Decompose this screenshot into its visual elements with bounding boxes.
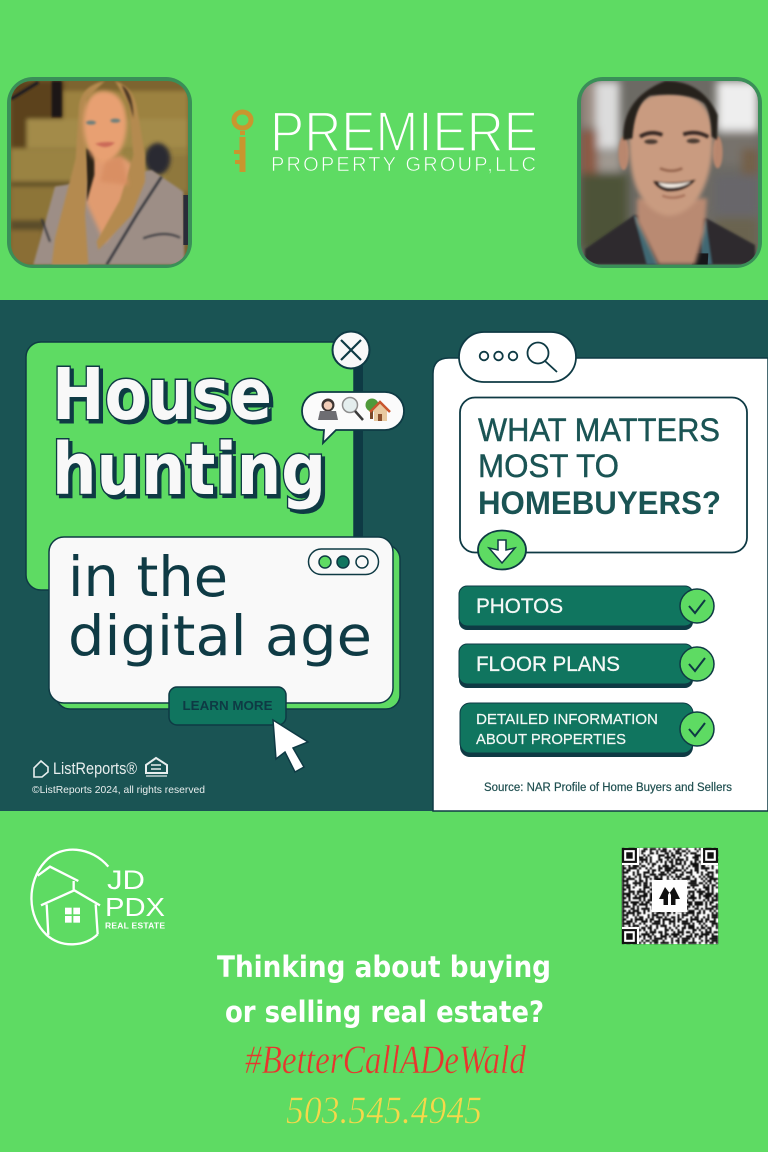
icon: ListReports house <box>34 761 48 777</box>
panel: in the digital age card <box>49 537 400 709</box>
button: learn more <box>169 687 286 725</box>
hashtag: #BetterCallADeWald <box>245 1037 527 1082</box>
QR code <box>622 848 718 944</box>
list item: floor plans <box>459 644 714 688</box>
sweater <box>33 170 184 265</box>
photo: man agent <box>577 77 762 268</box>
icon: woman at laptop <box>318 398 338 420</box>
call to action text <box>217 950 551 1029</box>
heading: what matters most to homebuyers: WHAT MATTERS <box>478 412 720 448</box>
brand: ListReports footer: ListReports® <box>53 760 137 778</box>
panel: what matters white card <box>433 332 768 811</box>
shirt <box>634 215 712 265</box>
logo: Premiere Property Group: PREMIERE <box>270 100 538 164</box>
photo: woman agent <box>7 77 192 268</box>
icon: down arrow <box>478 530 526 570</box>
text: in the digital age: in the <box>68 545 228 609</box>
QR center logo <box>652 880 687 912</box>
blurred background <box>581 81 758 252</box>
heading: what matters most to homebuyers: MOST TO <box>478 448 619 484</box>
jacket <box>584 215 756 265</box>
banner background <box>0 300 768 811</box>
face <box>629 92 713 216</box>
icon: gold key <box>234 112 251 172</box>
list item: floor plans: FLOOR PLANS <box>476 653 620 676</box>
heading: house hunting: House <box>52 353 272 436</box>
heading: what matters most to homebuyers: HOMEBUYERS? <box>478 485 721 521</box>
icon: magnifying glass <box>342 398 363 420</box>
call to action text: or selling real estate? <box>225 995 544 1029</box>
logo: JD PDX Real Estate <box>31 850 165 944</box>
list item: photos <box>459 586 714 630</box>
icon: check <box>680 589 714 623</box>
icon: check <box>680 647 714 681</box>
skin chest <box>86 156 132 243</box>
icon: house in circle <box>31 850 108 944</box>
heading: what matters most to homebuyers <box>478 412 721 521</box>
icon: check <box>680 712 714 746</box>
heading: house hunting: hunting <box>52 428 326 511</box>
text: in the digital age <box>68 545 372 668</box>
panel: house hunting title card <box>26 342 363 590</box>
QR finder patterns <box>622 848 718 944</box>
ears <box>618 137 629 170</box>
search pill <box>459 332 576 382</box>
list item: detailed information: ABOUT PROPERTIES <box>476 731 626 748</box>
brand: ListReports footer: ©ListReports 2024, all rights reserved <box>32 784 205 796</box>
hair <box>52 81 145 265</box>
question box <box>460 398 747 552</box>
icon: close button <box>332 332 370 368</box>
list item: detailed information <box>460 703 714 757</box>
stairs <box>11 81 188 265</box>
logo: JD PDX Real Estate: JD <box>107 865 145 895</box>
icon: cursor arrow <box>273 720 308 772</box>
speech bubble with emoji icons <box>302 392 404 443</box>
logo: Premiere Property Group: PROPERTY GROUP,LLC <box>271 154 536 176</box>
neck <box>637 198 707 265</box>
icon: house with tree <box>366 398 390 421</box>
list item: detailed information: DETAILED INFORMATION <box>476 711 658 728</box>
logo: JD PDX Real Estate: REAL ESTATE <box>105 920 165 930</box>
call to action text: Thinking about buying <box>217 950 551 984</box>
list item: photos: PHOTOS <box>476 595 563 618</box>
brand: ListReports footer <box>32 758 205 796</box>
source note: Source: NAR Profile of Home Buyers and Sellers <box>484 782 732 794</box>
face <box>83 91 127 163</box>
hair <box>623 81 718 140</box>
text: in the digital age: digital age <box>68 604 372 668</box>
heading: house hunting <box>52 353 326 511</box>
logo: JD PDX Real Estate: PDX <box>105 892 165 922</box>
button: learn more: LEARN MORE <box>182 698 273 713</box>
window control dots <box>308 549 378 574</box>
logo: Premiere Property Group <box>234 100 538 176</box>
icon: equal housing <box>146 758 167 777</box>
phone number: 503.545.4945 <box>286 1089 482 1132</box>
